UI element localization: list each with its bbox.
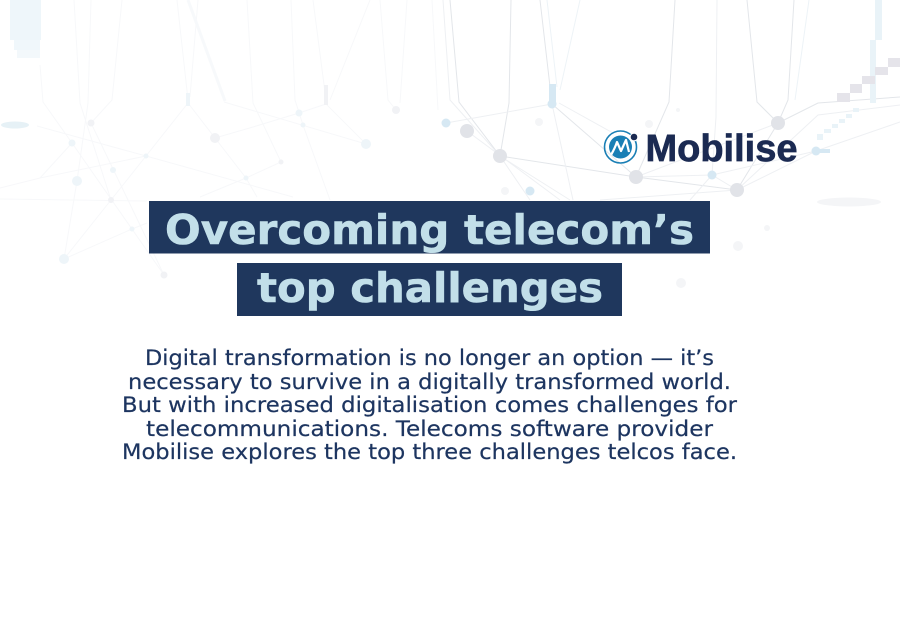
title line 1: Overcoming telecom’s <box>165 206 694 254</box>
title line 2: top challenges <box>257 264 603 312</box>
intro paragraph: But with increased digitalisation comes challenges for <box>122 393 737 418</box>
title <box>149 201 710 316</box>
faint network background left <box>0 0 438 278</box>
intro paragraph <box>122 346 737 465</box>
intro paragraph: necessary to survive in a digitally transformed world. <box>128 370 731 395</box>
intro paragraph: telecommunications. Telecoms software provider <box>146 417 713 442</box>
intro paragraph: Digital transformation is no longer an option — it’s <box>145 346 714 371</box>
intro paragraph: Mobilise explores the top three challenges telcos face. <box>122 440 737 465</box>
blurred pixel block top left <box>10 0 41 58</box>
icon: logo mark <box>604 131 638 163</box>
network background right <box>442 0 900 288</box>
logo: Mobilise <box>604 128 798 170</box>
pixelated diagonal streaks right <box>817 0 900 140</box>
logo wordmark: Mobilise <box>646 128 798 170</box>
